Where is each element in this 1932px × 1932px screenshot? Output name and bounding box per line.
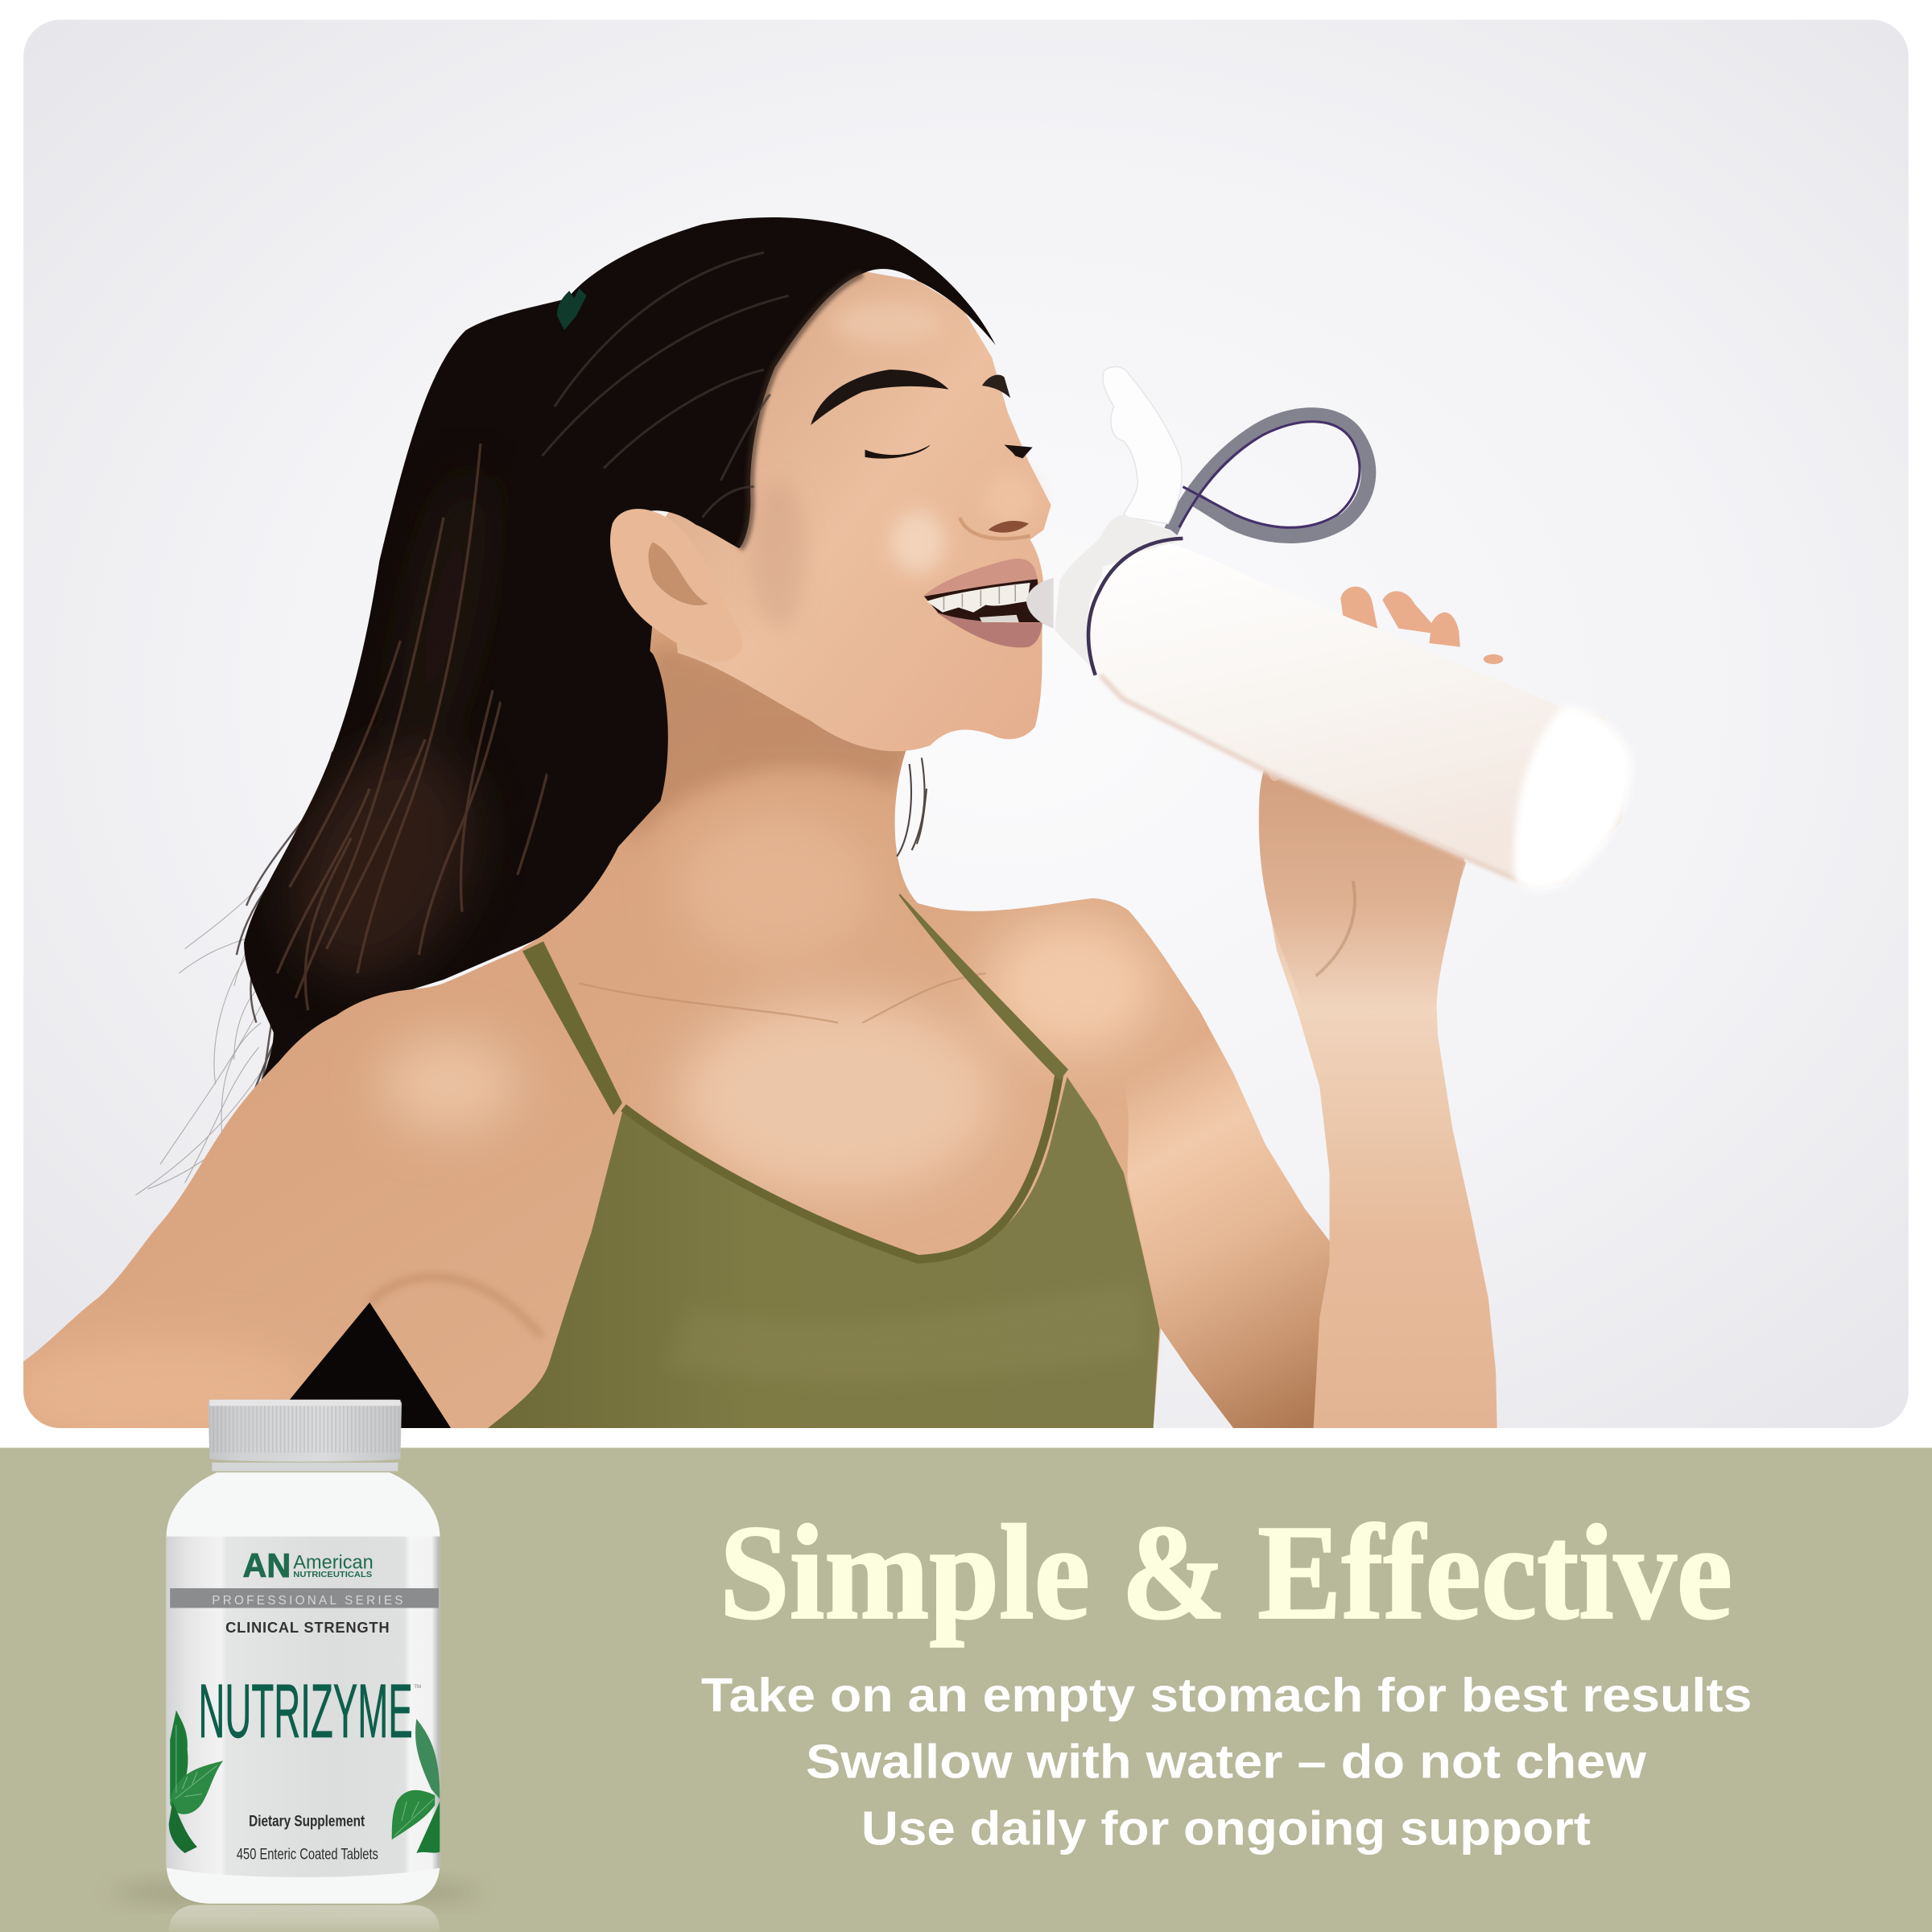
trademark: TM (414, 1684, 421, 1690)
fingers behind bottle (1340, 587, 1503, 664)
upper teeth (927, 583, 1030, 613)
lower edge warm shadow (1100, 675, 1528, 885)
right leaves (392, 1719, 440, 1853)
collar cap (1055, 515, 1183, 667)
cap top rim (209, 1400, 400, 1406)
neck shadow under jaw (629, 641, 924, 850)
line one: Take on an empty stomach for best results (701, 1668, 1752, 1722)
ponytail highlights (276, 444, 548, 1011)
strength text: CLINICAL STRENGTH (225, 1619, 390, 1636)
hair wisps by neck (897, 758, 927, 857)
cap ribs (209, 1406, 400, 1453)
closed eye near (865, 445, 931, 459)
body shading clipped to skin (0, 641, 1158, 1442)
jar body (167, 1472, 440, 1904)
eyebrow far (982, 375, 1010, 398)
flip handle (1103, 367, 1182, 524)
label base (167, 1537, 440, 1877)
mouth (923, 559, 1042, 647)
tablet count: 450 Enteric Coated Tablets (237, 1847, 378, 1864)
torso and left arm (23, 616, 1330, 1428)
heading: Simple & Effective (720, 1498, 1732, 1648)
hair behind the raised arm (290, 1302, 451, 1428)
bottle reflection (169, 1905, 440, 1932)
thumb nail (1265, 745, 1287, 782)
cap (208, 1400, 402, 1472)
flyaway hair wisps (135, 887, 269, 1195)
strap loop (1170, 415, 1368, 536)
panel: olive band (0, 1447, 1932, 1932)
armpit crease (369, 1277, 542, 1337)
brand name: American (293, 1551, 374, 1573)
olive tank top (488, 894, 1159, 1428)
tooth gaps (943, 584, 1015, 610)
panel: photo of woman drinking (0, 19, 1909, 1442)
water bottle (1026, 367, 1632, 890)
lower teeth (980, 615, 1019, 622)
cap lower skirt (212, 1463, 398, 1472)
strap inner edge (1179, 422, 1360, 527)
collarbone creases (579, 973, 985, 1022)
product bottle: NUTRIZYME (198, 1669, 413, 1754)
hand holding the bottle (1259, 741, 1466, 1013)
nose underside shadow (960, 518, 1030, 539)
bottle base glow (1514, 707, 1632, 890)
right forearm (1265, 789, 1497, 1428)
face (666, 271, 1051, 751)
ground shadow (111, 1879, 481, 1906)
hair strand highlights (542, 253, 789, 518)
closed eye far (1004, 445, 1033, 458)
neckline trim (623, 1072, 1059, 1259)
dark collar ring (1088, 539, 1183, 675)
mouth interior (924, 579, 1041, 622)
head hair (493, 217, 996, 862)
right strap (899, 894, 1067, 1080)
ear (610, 509, 742, 662)
line two: Swallow with water – do not chew (806, 1735, 1647, 1789)
instructions text (701, 1668, 1752, 1855)
hand crease shading (1316, 881, 1355, 976)
nostril (989, 521, 1029, 533)
fold shading (666, 1282, 1146, 1381)
product bottle (111, 1400, 481, 1932)
brand subline: NUTRICEUTICALS (293, 1571, 373, 1579)
lower lip (936, 613, 1042, 647)
series band (170, 1588, 439, 1608)
strand lines (277, 444, 573, 1010)
photo backdrop (23, 19, 1909, 1428)
ear shell (610, 509, 742, 662)
soft hairline (739, 274, 862, 548)
cap shell (208, 1400, 402, 1462)
bottle body (1088, 543, 1632, 889)
neck and chest highlights (0, 813, 1158, 1442)
left strap (522, 941, 622, 1115)
left leaves (169, 1710, 223, 1853)
brand mark: AN (243, 1547, 291, 1584)
series text: PROFESSIONAL SERIES (212, 1594, 403, 1608)
frizzy hair edge (235, 751, 333, 1088)
top fabric (488, 1077, 1159, 1428)
brown sheen (277, 514, 488, 989)
product type: Dietary Supplement (249, 1813, 365, 1830)
upper lip (923, 559, 1038, 597)
ponytail (244, 295, 671, 1103)
spout (1026, 578, 1054, 629)
cheek and nose highlights (752, 300, 1035, 629)
strap band (1170, 415, 1368, 536)
eyebrow near (811, 369, 949, 425)
ear inner shadow (648, 542, 708, 605)
line three: Use daily for ongoing support (861, 1801, 1591, 1855)
hair tie (557, 288, 587, 330)
label (167, 1537, 440, 1877)
right upper arm (1115, 906, 1333, 1428)
